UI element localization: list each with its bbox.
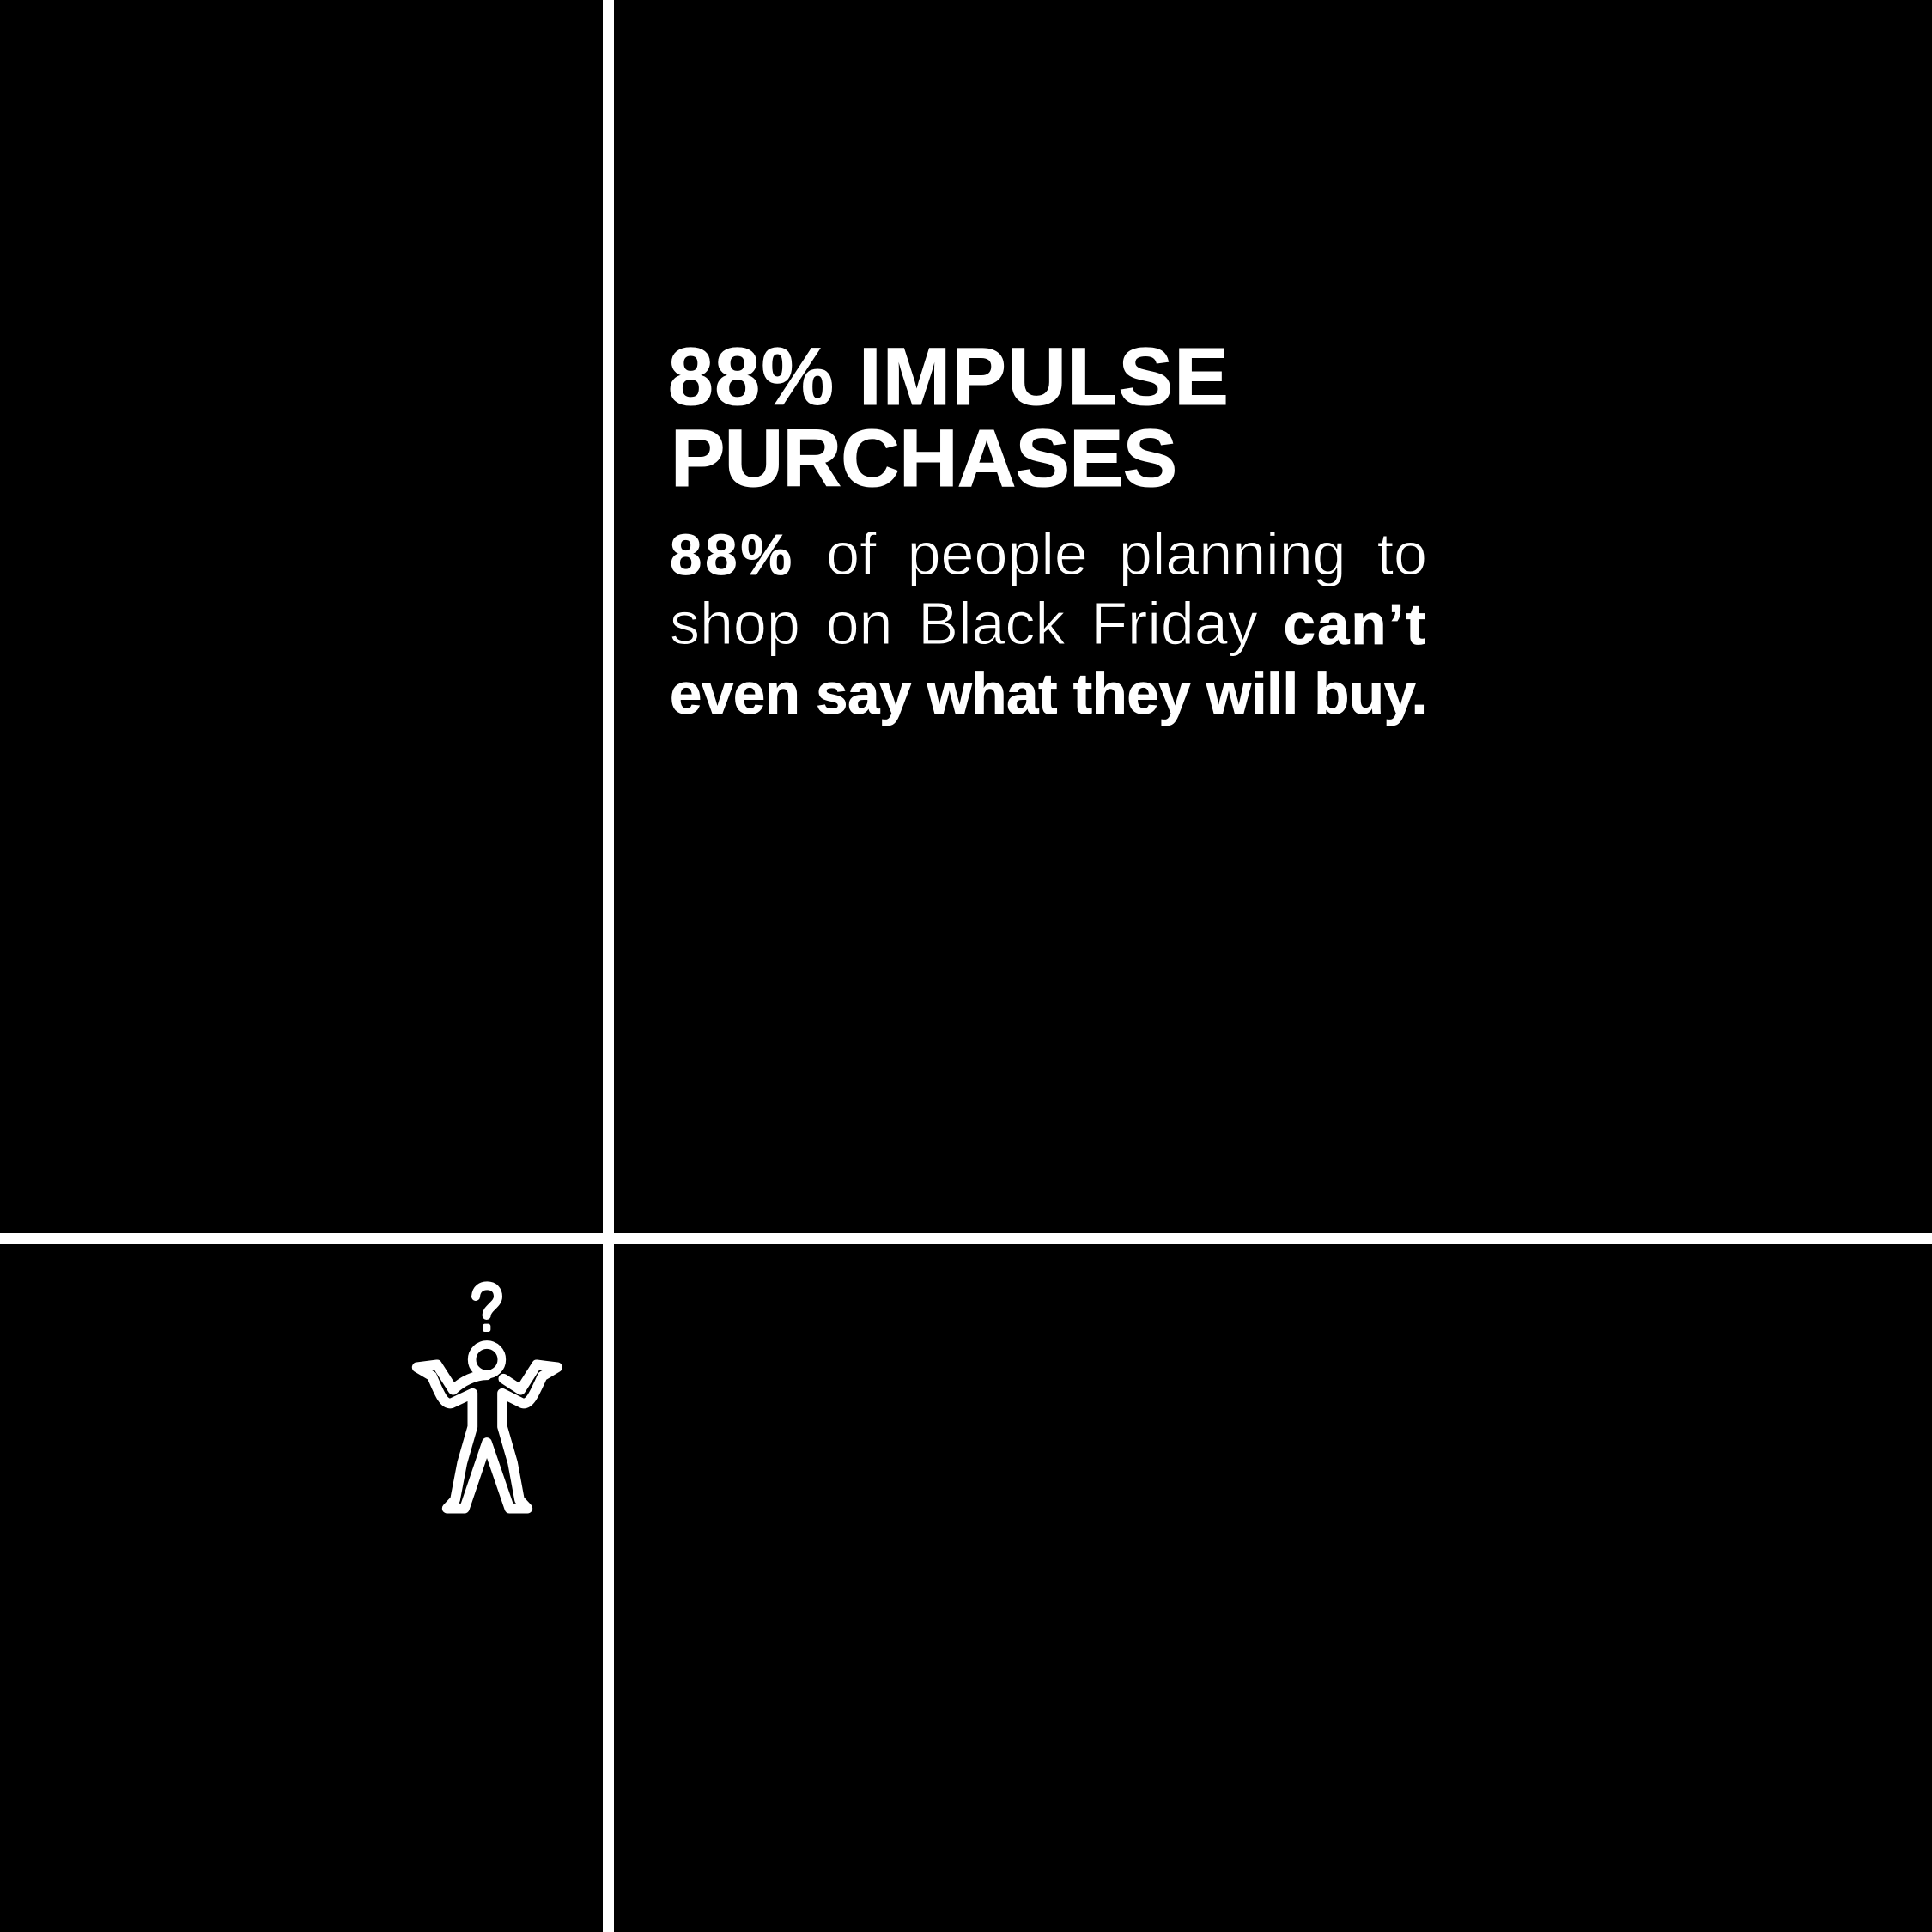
title	[668, 331, 1230, 504]
title: PURCHASES	[671, 413, 1176, 504]
icon part: head	[472, 1345, 501, 1375]
title: 88% IMPULSE	[668, 331, 1230, 422]
body text: 88% of people planning to	[670, 520, 1427, 587]
icon part: question mark	[476, 1285, 498, 1332]
body text: even say what they will buy.	[670, 662, 1427, 726]
body text	[670, 520, 1427, 726]
body text: shop on Black Friday can’t	[670, 590, 1427, 657]
icon part: body and arms	[417, 1364, 557, 1509]
